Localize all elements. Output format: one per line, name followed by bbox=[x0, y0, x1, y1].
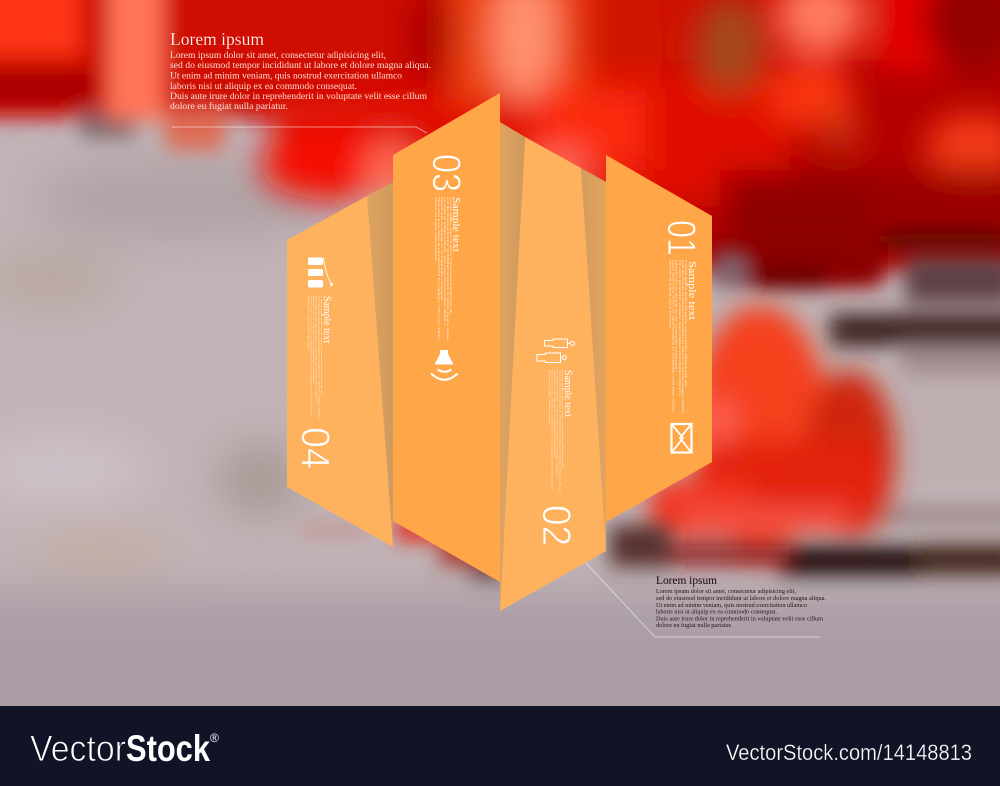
body text 03 bbox=[434, 197, 453, 342]
callout: top text: laboris nisi ut aliquip ex ea commodo consequat. bbox=[170, 82, 357, 92]
body text 04: Ut enim ad minim veniam, quis nostrud exercitation ullamco bbox=[314, 296, 318, 404]
body text 03: Lorem ipsum dolor sit amet, consectetur adipisicing elit, bbox=[449, 197, 453, 315]
body text 03: Duis aute irure dolor in reprehenderit in voluptate velit esse cillum bbox=[437, 197, 441, 340]
body text 04: dolore eu fugiat nulla pariatur. bbox=[307, 296, 310, 351]
body text 02 bbox=[548, 370, 564, 493]
callout: top text bbox=[170, 29, 431, 112]
body text 01: laboris nisi ut aliquip ex ea commodo consequat. bbox=[675, 260, 679, 371]
body text 04 bbox=[307, 296, 323, 419]
panel: strip 01 bbox=[606, 155, 712, 522]
icon: connectors bbox=[537, 339, 574, 362]
icon: envelope bbox=[672, 424, 692, 452]
body text 01 bbox=[669, 260, 688, 415]
callout: bottom text: Ut enim ad minim veniam, quis nostrud exercitation ullamco bbox=[656, 602, 807, 609]
panel: strip 02 bbox=[500, 122, 606, 611]
callout: bottom text bbox=[656, 573, 826, 629]
callout: top text: Lorem ipsum dolor sit amet, consectetur adipisicing elit, bbox=[170, 51, 386, 61]
footer bar: ® bbox=[210, 731, 219, 745]
body text 01: Duis aute irure dolor in reprehenderit in voluptate velit esse cillum bbox=[672, 260, 675, 413]
body text 04: laboris nisi ut aliquip ex ea commodo consequat. bbox=[312, 296, 315, 384]
label 01: Sample text bbox=[686, 261, 698, 320]
leader line: bottom bbox=[586, 563, 820, 637]
body text 04: Lorem ipsum dolor sit amet, consectetur adipisicing elit, bbox=[320, 296, 323, 396]
callout: bottom text: Duis aute irure dolor in reprehenderit in voluptate velit esse cillum bbox=[656, 616, 823, 622]
callout: bottom text: sed do eiusmod tempor incididunt ut labore et dolore magna aliqua. bbox=[656, 595, 826, 602]
footer url: VectorStock.com/14148813 bbox=[726, 740, 972, 765]
number 02: 02 bbox=[534, 505, 578, 546]
number 04: 04 bbox=[293, 427, 337, 469]
body text 02: Lorem ipsum dolor sit amet, consectetur adipisicing elit, bbox=[561, 370, 564, 470]
body text 02: laboris nisi ut aliquip ex ea commodo consequat. bbox=[553, 370, 556, 458]
footer bar: Stock bbox=[126, 728, 210, 769]
label 04: Sample text bbox=[321, 296, 332, 343]
body text 02: dolore eu fugiat nulla pariatur. bbox=[548, 370, 551, 425]
body text 03: sed do eiusmod tempor incididunt ut labore et dolore magna aliqua. bbox=[446, 197, 450, 342]
body text 01: sed do eiusmod tempor incididunt ut labore et dolore magna aliqua. bbox=[681, 260, 685, 415]
icon: bars with curve bbox=[308, 258, 333, 288]
callout: bottom text: laboris nisi ut aliquip ex ea commodo consequat. bbox=[656, 608, 777, 616]
callout: top text: sed do eiusmod tempor incididunt ut labore et dolore magna aliqua. bbox=[170, 61, 431, 71]
body text 02: Ut enim ad minim veniam, quis nostrud exercitation ullamco bbox=[555, 370, 559, 478]
body text 01: Lorem ipsum dolor sit amet, consectetur adipisicing elit, bbox=[684, 260, 688, 388]
callout: top text: dolore eu fugiat nulla pariatur. bbox=[170, 101, 288, 112]
label 02: Sample text bbox=[562, 370, 573, 417]
body text 04: sed do eiusmod tempor incididunt ut labore et dolore magna aliqua. bbox=[318, 296, 320, 419]
leader line: top bbox=[172, 127, 427, 133]
body text 02: sed do eiusmod tempor incididunt ut labore et dolore magna aliqua. bbox=[559, 370, 561, 493]
callout: top text: Lorem ipsum bbox=[170, 29, 264, 49]
callout: top text: Duis aute irure dolor in reprehenderit in voluptate velit esse cillum bbox=[170, 92, 428, 102]
number 03: 03 bbox=[424, 154, 468, 192]
panel: strip 03 bbox=[393, 93, 500, 582]
panel: strip 04 bbox=[287, 182, 393, 547]
footer bar bbox=[0, 706, 1000, 786]
body text 01: Ut enim ad minim veniam, quis nostrud exercitation ullamco bbox=[677, 260, 682, 397]
icon: bell with waves bbox=[431, 350, 458, 380]
number 01: 01 bbox=[659, 220, 703, 256]
callout: bottom text: dolore eu fugiat nulla pariatur. bbox=[656, 622, 732, 629]
label 03: Sample text bbox=[450, 197, 462, 252]
body text 02: Duis aute irure dolor in reprehenderit in voluptate velit esse cillum bbox=[551, 370, 553, 490]
body text 03: laboris nisi ut aliquip ex ea commodo consequat. bbox=[440, 197, 444, 301]
body text 01: dolore eu fugiat nulla pariatur. bbox=[669, 260, 672, 330]
body text 04: Duis aute irure dolor in reprehenderit in voluptate velit esse cillum bbox=[310, 296, 312, 416]
callout: bottom text: Lorem ipsum dolor sit amet, consectetur adipisicing elit, bbox=[656, 588, 796, 595]
logo: VectorStock: Vector bbox=[30, 728, 126, 769]
body text 03: dolore eu fugiat nulla pariatur. bbox=[434, 197, 438, 262]
body text 03: Ut enim ad minim veniam, quis nostrud exercitation ullamco bbox=[443, 197, 447, 325]
callout: bottom text: Lorem ipsum bbox=[656, 573, 718, 587]
callout: top text: Ut enim ad minim veniam, quis nostrud exercitation ullamco bbox=[170, 72, 402, 82]
